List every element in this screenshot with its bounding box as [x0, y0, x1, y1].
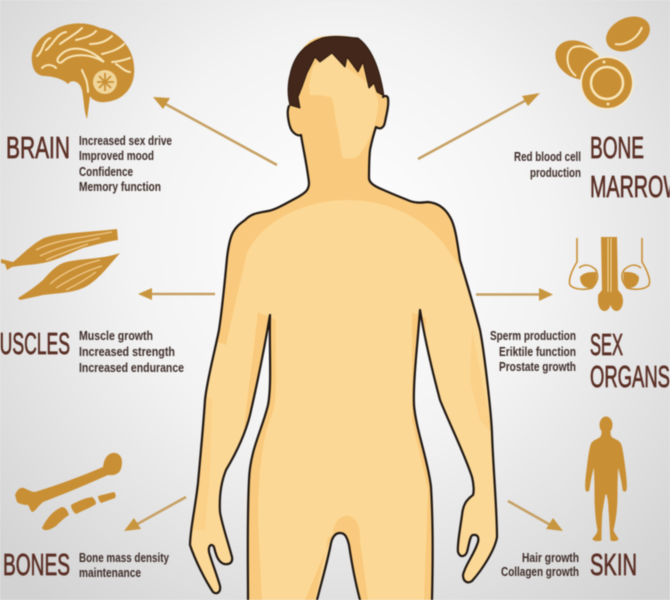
text: bone marrow benefits: production: [530, 165, 581, 180]
heading: brain: BRAIN: [6, 130, 70, 165]
text: bone marrow benefits: [514, 149, 581, 180]
heading: sex organs: SEX: [590, 327, 623, 362]
icon: bones: [15, 453, 122, 530]
text: bones benefits: maintenance: [79, 565, 141, 580]
text: sex organs benefits: Sperm production: [490, 328, 576, 343]
text: sex organs benefits: [490, 328, 576, 374]
human figure: [190, 30, 497, 600]
icon: body silhouette: [586, 416, 626, 541]
text: brain benefits: Memory function: [79, 179, 161, 194]
text: sex organs benefits: Eriktile function: [499, 344, 576, 359]
heading: skin: SKIN: [590, 547, 637, 582]
text: bones benefits: [79, 550, 170, 580]
icon: brain: [32, 23, 134, 119]
text: skin benefits: Hair growth: [522, 550, 579, 565]
text: muscles benefits: [79, 328, 184, 375]
arrow: to muscles: [138, 288, 215, 300]
icon: sex organs: [569, 237, 650, 311]
text: bone marrow benefits: Red blood cell: [514, 149, 581, 164]
arrow: to brain: [153, 97, 277, 165]
text: brain benefits: Increased sex drive: [79, 133, 172, 148]
text: muscles benefits: Increased strength: [79, 344, 175, 359]
face highlight: [309, 53, 378, 159]
icon: blood cells: [548, 10, 656, 110]
text: skin benefits: [501, 550, 579, 579]
arrow: to bones: [124, 497, 186, 531]
text: brain benefits: Confidence: [79, 164, 133, 179]
text: muscles benefits: Increased endurance: [79, 360, 184, 375]
icon: muscles: [1, 229, 120, 300]
arrow: to skin: [508, 501, 563, 531]
text: sex organs benefits: Prostate growth: [499, 359, 576, 374]
arrow: to bone marrow: [418, 93, 540, 159]
text: muscles benefits: Muscle growth: [79, 328, 153, 343]
heading: bones: BONES: [3, 547, 70, 582]
body shading: [190, 30, 492, 600]
text: bones benefits: Bone mass density: [79, 550, 170, 565]
text: brain benefits: Improved mood: [79, 148, 154, 163]
text: skin benefits: Collagen growth: [501, 564, 579, 579]
text: brain benefits: [79, 133, 172, 194]
body outline: [190, 96, 497, 600]
arrow: to sex organs: [476, 288, 553, 301]
heading: sex organs: [590, 327, 670, 394]
body fill: [190, 36, 497, 600]
heading: bone marrow: [590, 130, 670, 204]
hair: [288, 36, 384, 108]
